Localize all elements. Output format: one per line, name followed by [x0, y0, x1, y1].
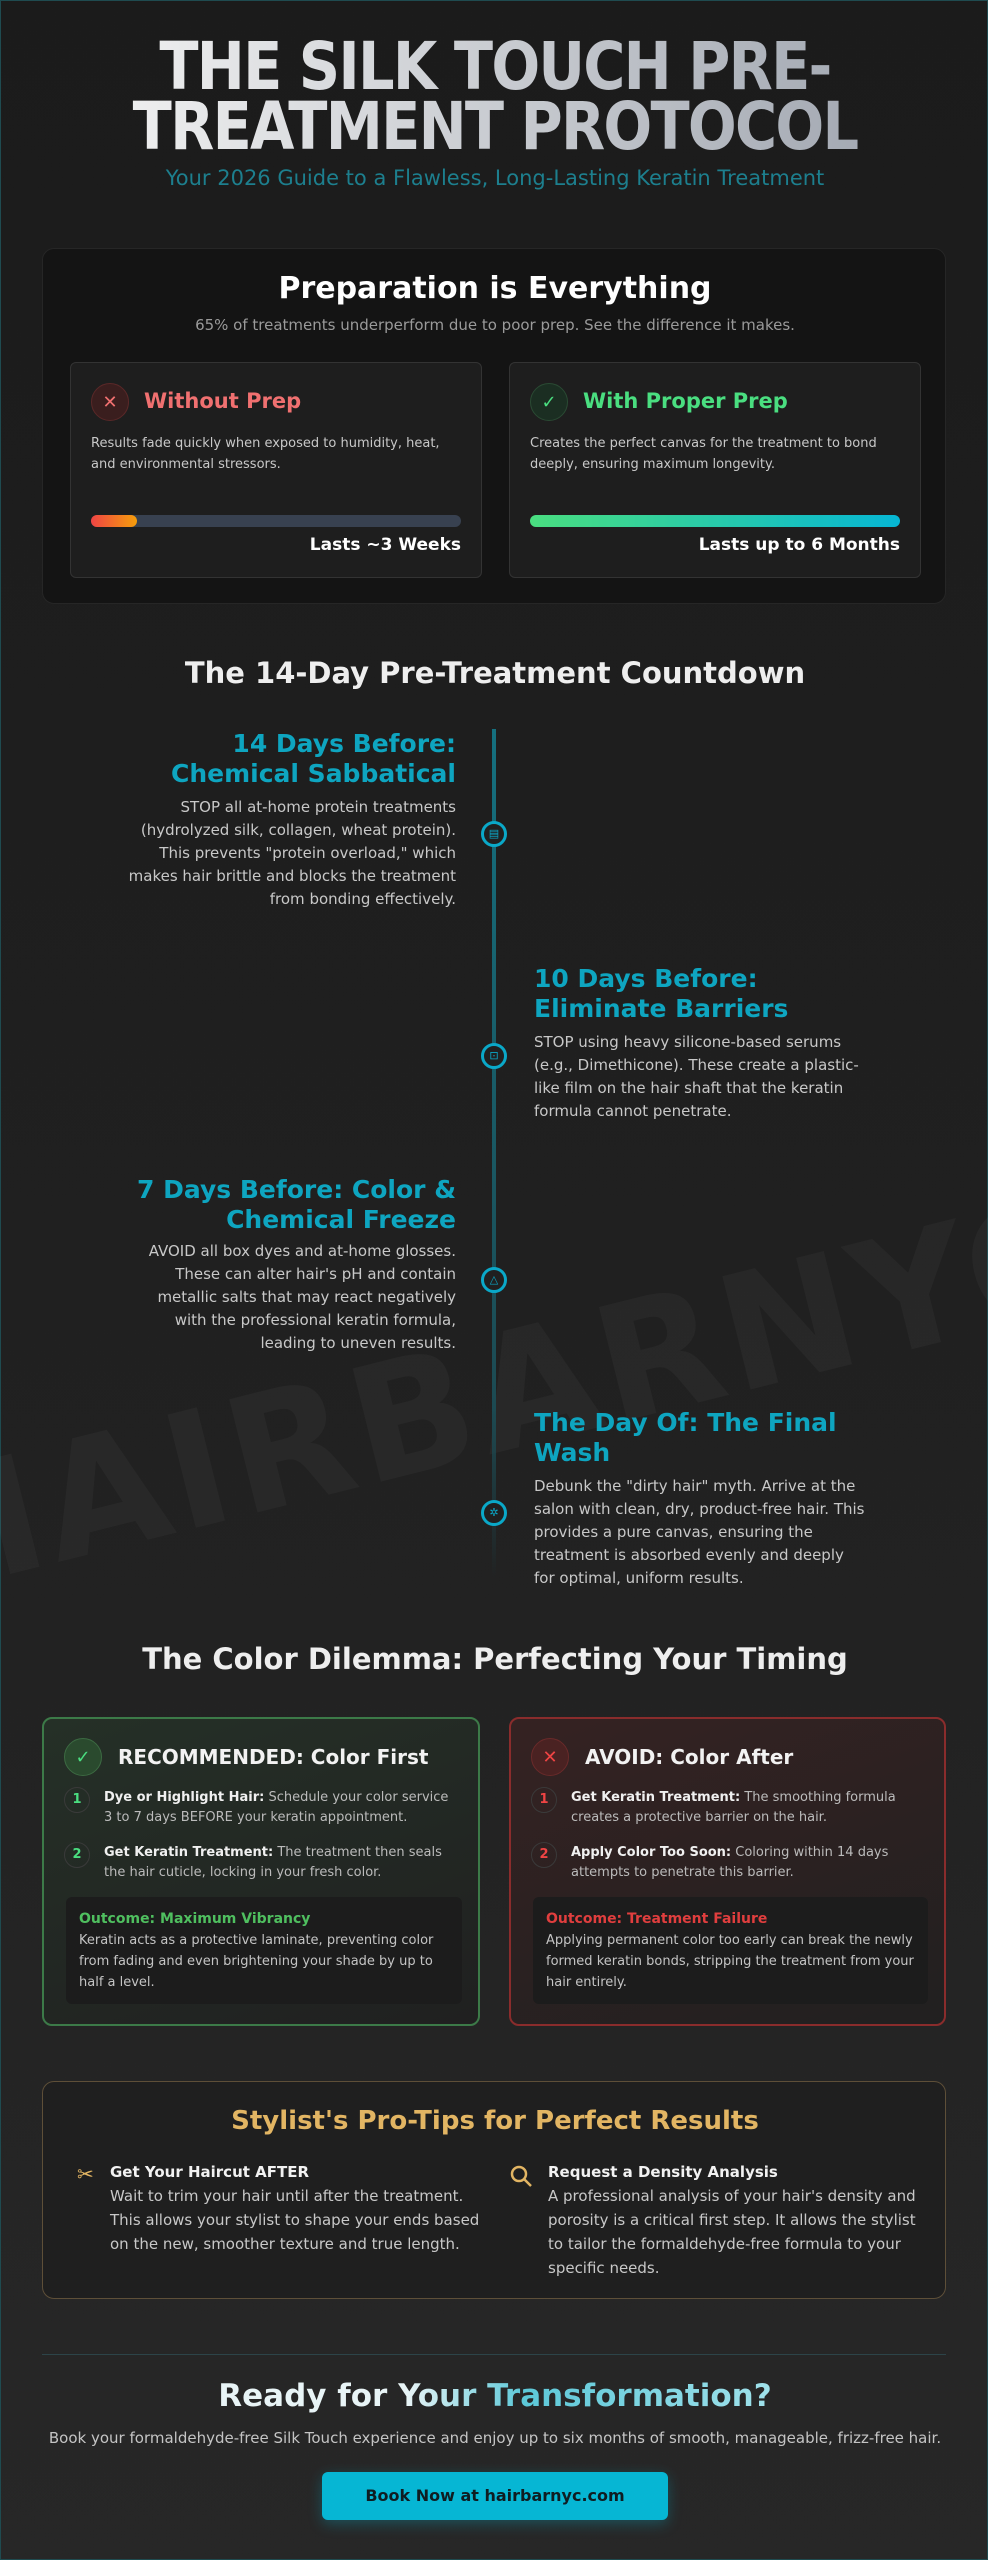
- outcome box: Outcome: Treatment Failure: [546, 1911, 767, 1927]
- panel: color first: [42, 1717, 480, 2026]
- icon: calendar: ▤: [489, 827, 499, 840]
- panel: color first: RECOMMENDED: Color First: [118, 1745, 428, 1769]
- icon: sparkle: ✲: [489, 1506, 499, 1519]
- outcome box: [533, 1897, 928, 2004]
- CTA text: Book your formaldehyde-free Silk Touch experience and enjoy up to six months of smooth, manageable, frizz-free hair.: [49, 2429, 941, 2447]
- card: with prep: [509, 362, 921, 578]
- outcome box: [66, 1897, 462, 2004]
- icon: x: [91, 383, 129, 421]
- timeline item: 7 days: Chemical Freeze: [226, 1205, 456, 1234]
- heading: countdown: The 14-Day Pre-Treatment Countdown: [185, 656, 805, 690]
- timeline item: 7 days: [137, 1175, 456, 1352]
- icon: x: ✕: [102, 392, 118, 413]
- subheading: 65% of treatments underperform due to poor prep. See the difference it makes.: [195, 316, 795, 334]
- timeline item: 10 days: [534, 964, 859, 1120]
- timeline line: [492, 729, 496, 1579]
- card: without prep: [70, 362, 482, 578]
- tip: haircut: Get Your Haircut AFTER: [110, 2163, 309, 2181]
- icon: sparkle: [481, 1500, 507, 1526]
- icon: lock: [481, 1043, 507, 1069]
- panel: pro-tips: [42, 2081, 946, 2299]
- panel: color first: Dye or Highlight Hair: Schedule your color service 3 to 7 days BEFORE your keratin appointment.: [104, 1790, 448, 1825]
- icon: x: ✕: [542, 1747, 558, 1768]
- timeline item: 14 days: Chemical Sabbatical: [171, 759, 456, 788]
- icon: scissors: ✂: [77, 2162, 94, 2186]
- icon: x: [531, 1738, 569, 1776]
- panel: color after: [509, 1717, 946, 2026]
- panel: color after: Get Keratin Treatment: The smoothing formula creates a protective barrier on the hair.: [571, 1790, 896, 1825]
- timeline item: 14 days: 14 Days Before:: [232, 729, 456, 758]
- panel: color first: 1: [72, 1792, 82, 1807]
- icon: check: ✓: [75, 1747, 91, 1768]
- icon: check: [530, 383, 568, 421]
- icon: calendar: [481, 821, 507, 847]
- timeline item: day of: [534, 1408, 864, 1587]
- tip: density: A professional analysis of your hair's density and porosity is a critical first step. It allows the stylist to tailor the formaldehyde-free formula to your specific needs.: [548, 2187, 916, 2277]
- icon: lock: ⊡: [489, 1049, 499, 1062]
- outcome box: Keratin acts as a protective laminate, preventing color from fading and even brightening your shade by up to half a level.: [79, 1933, 433, 1990]
- panel: color after: 1: [539, 1792, 549, 1807]
- heading: Preparation is Everything: [278, 271, 712, 306]
- timeline item: 14 days: [129, 729, 456, 908]
- card: without prep: Lasts ~3 Weeks: [310, 535, 461, 555]
- tip: haircut: Wait to trim your hair until after the treatment. This allows your stylist to shape your ends based on the new, smoother texture and true length.: [110, 2187, 479, 2253]
- CTA heading: Ready for Your Transformation?: [218, 2378, 772, 2414]
- panel: color after: AVOID: Color After: [585, 1745, 793, 1769]
- title: [65, 37, 925, 157]
- icon: check: [64, 1738, 102, 1776]
- outcome box: Applying permanent color too early can break the newly formed keratin bonds, stripping the treatment from your hair entirely.: [546, 1933, 914, 1990]
- icon: check: ✓: [541, 392, 557, 413]
- card: with prep: Lasts up to 6 Months: [699, 535, 900, 555]
- bar: 3 weeks: [91, 515, 461, 527]
- icon: magnifier: [510, 2166, 532, 2187]
- timeline item: day of: Wash: [534, 1438, 610, 1467]
- title: TREATMENT PROTOCOL: [133, 88, 857, 165]
- panel: preparation: [42, 248, 946, 604]
- heading: Stylist's Pro-Tips for Perfect Results: [231, 2106, 759, 2136]
- timeline item: 7 days: 7 Days Before: Color &: [137, 1175, 456, 1204]
- button: Book Now at hairbarnyc.com: [365, 2486, 625, 2505]
- timeline item: 7 days: AVOID all box dyes and at-home glosses. These can alter hair's pH and contain metallic salts that may react negatively with the professional keratin formula, leading to uneven results.: [149, 1242, 456, 1352]
- heading: color dilemma: The Color Dilemma: Perfecting Your Timing: [142, 1642, 848, 1676]
- card: without prep: Results fade quickly when exposed to humidity, heat, and environmental stressors.: [91, 436, 440, 472]
- timeline item: 10 days: Eliminate Barriers: [534, 994, 788, 1023]
- timeline item: 10 days: STOP using heavy silicone-based serums (e.g., Dimethicone). These create a plastic-like film on the hair shaft that the keratin formula cannot penetrate.: [534, 1033, 859, 1120]
- panel: color after: Apply Color Too Soon: Coloring within 14 days attempts to penetrate this barrier.: [571, 1845, 888, 1880]
- card: without prep: Without Prep: [144, 389, 301, 413]
- panel: color after: 2: [539, 1847, 549, 1862]
- icon: warning: △: [490, 1273, 498, 1286]
- icon: warning: [481, 1267, 507, 1293]
- title: THE SILK TOUCH PRE-: [159, 28, 831, 105]
- timeline item: day of: Debunk the "dirty hair" myth. Arrive at the salon with clean, dry, product-free hair. This provides a pure canvas, ensuring the treatment is absorbed evenly and deeply for optimal, uniform results.: [534, 1477, 864, 1587]
- button: [322, 2472, 668, 2520]
- card: with prep: With Proper Prep: [583, 389, 788, 413]
- timeline item: 10 days: 10 Days Before:: [534, 964, 758, 993]
- timeline item: 14 days: STOP all at-home protein treatments (hydrolyzed silk, collagen, wheat protein). This prevents "protein overload," which makes hair brittle and blocks the treatment from bonding effectively.: [129, 798, 456, 908]
- outcome box: Outcome: Maximum Vibrancy: [79, 1911, 310, 1927]
- panel: color first: Get Keratin Treatment: The treatment then seals the hair cuticle, locking in your fresh color.: [104, 1845, 442, 1880]
- panel: color first: 2: [72, 1847, 82, 1862]
- bar: 6 months: [530, 515, 900, 527]
- tip: density: Request a Density Analysis: [548, 2163, 778, 2181]
- subtitle: Your 2026 Guide to a Flawless, Long-Lasting Keratin Treatment: [166, 166, 824, 190]
- card: with prep: Creates the perfect canvas for the treatment to bond deeply, ensuring maximum longevity.: [530, 436, 877, 472]
- timeline item: day of: The Day Of: The Final: [534, 1408, 837, 1437]
